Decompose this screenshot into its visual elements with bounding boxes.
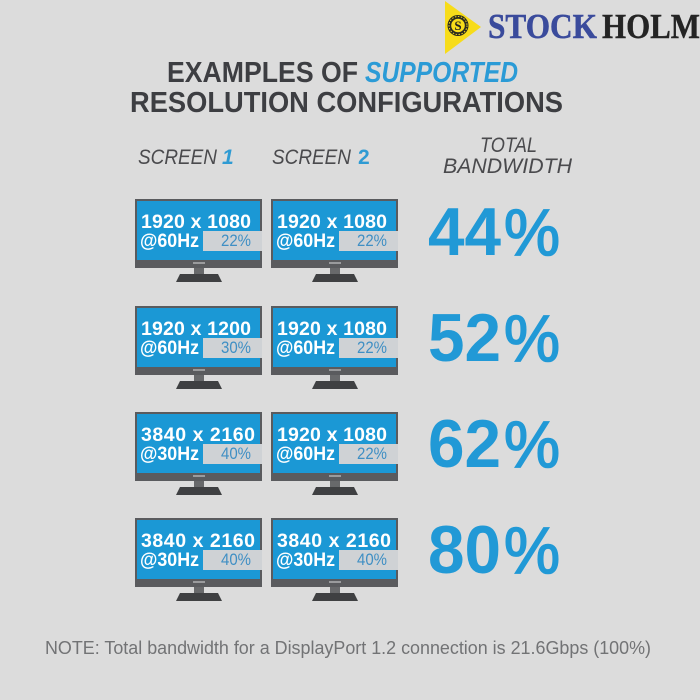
monitor: 1920 x 1080 22%: 1920 x 1080	[277, 424, 387, 446]
total: 80%: %	[504, 513, 560, 587]
logo wordmark: STOCK	[488, 7, 597, 46]
monitor: 3840 x 2160 40%: 3840 x 2160	[141, 424, 255, 446]
monitor: 1920 x 1080 22%: 22%	[221, 232, 251, 250]
title: EXAMPLES OF	[167, 57, 358, 89]
monitor: 3840 x 2160 40%: 3840 x 2160	[277, 530, 391, 552]
monitor: 3840 x 2160 40%: 3840 x 2160	[141, 530, 255, 552]
icon: yellow triangle emblem: S	[454, 18, 462, 33]
monitor: 1920 x 1080 22%: 1920 x 1080	[277, 318, 387, 340]
total: 44%: %	[504, 195, 560, 269]
total: 44%	[428, 194, 560, 270]
monitor: 1920 x 1080 22%: 22%	[357, 339, 387, 357]
column heading: screen 1: 1	[222, 146, 234, 169]
monitor: 3840 x 2160 40%: 40%	[221, 445, 251, 463]
monitor: 1920 x 1200 30%	[135, 306, 262, 389]
total: 52%: 52	[428, 300, 501, 376]
monitor: 3840 x 2160 40%: @30Hz	[140, 549, 199, 571]
monitor: 1920 x 1080 22%: @60Hz	[276, 337, 335, 359]
column heading: total bandwidth: BANDWIDTH	[443, 155, 573, 178]
column heading: screen 2: 2	[358, 146, 370, 169]
monitor: 3840 x 2160 40%	[135, 518, 262, 601]
column heading: total bandwidth: TOTAL	[480, 134, 537, 157]
total: 62%	[428, 406, 560, 482]
total: 80%: 80	[428, 512, 501, 588]
total: 52%: %	[504, 301, 560, 375]
total: 52%	[428, 300, 560, 376]
monitor: 1920 x 1080 22%: @60Hz	[276, 443, 335, 465]
monitor: 1920 x 1200 30%: 1920 x 1200	[141, 318, 251, 340]
title: SUPPORTED	[365, 57, 518, 89]
column heading: screen 1: SCREEN	[138, 146, 218, 169]
column heading: total bandwidth	[443, 134, 573, 178]
monitor: 1920 x 1080 22%	[271, 306, 398, 389]
total: 62%: 62	[428, 406, 501, 482]
logo wordmark	[488, 7, 700, 46]
row 3	[135, 406, 560, 495]
monitor: 3840 x 2160 40%: 40%	[221, 551, 251, 569]
monitor: 1920 x 1080 22%: 1920 x 1080	[141, 211, 251, 233]
monitor: 1920 x 1080 22%: 22%	[357, 232, 387, 250]
monitor: 1920 x 1200 30%: 30%	[221, 339, 251, 357]
row 1	[135, 194, 560, 282]
monitor: 1920 x 1080 22%	[271, 412, 398, 495]
column heading: screen 2: SCREEN	[272, 146, 352, 169]
icon: yellow triangle emblem	[445, 1, 481, 54]
total: 62%: %	[504, 407, 560, 481]
monitor: 1920 x 1080 22%: @60Hz	[276, 230, 335, 252]
monitor: 1920 x 1080 22%: 22%	[357, 445, 387, 463]
monitor: 3840 x 2160 40%: @30Hz	[140, 443, 199, 465]
row 2	[135, 300, 560, 389]
title	[130, 57, 563, 119]
monitor: 3840 x 2160 40%	[271, 518, 398, 601]
monitor: 3840 x 2160 40%: @30Hz	[276, 549, 335, 571]
monitor: 1920 x 1080 22%: @60Hz	[140, 230, 199, 252]
total: 80%	[428, 512, 560, 588]
monitor: 3840 x 2160 40%	[135, 412, 262, 495]
monitor: 1920 x 1080 22%	[135, 199, 262, 282]
monitor: 1920 x 1080 22%: 1920 x 1080	[277, 211, 387, 233]
monitor: 3840 x 2160 40%: 40%	[357, 551, 387, 569]
footnote: NOTE: Total bandwidth for a DisplayPort 1.2 connection is 21.6Gbps (100%)	[45, 638, 651, 658]
logo: Stockholm	[445, 1, 700, 54]
row 4	[135, 512, 560, 601]
title: RESOLUTION CONFIGURATIONS	[130, 87, 563, 119]
monitor: 1920 x 1080 22%	[271, 199, 398, 282]
monitor: 1920 x 1200 30%: @60Hz	[140, 337, 199, 359]
total: 44%: 44	[428, 194, 501, 270]
